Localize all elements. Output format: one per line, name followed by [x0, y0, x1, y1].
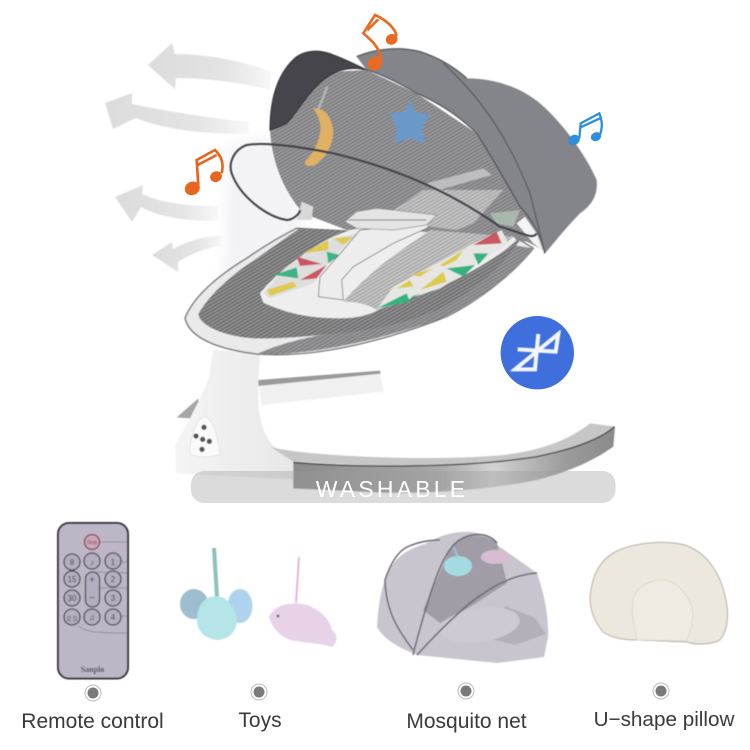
central harness strap: [318, 223, 432, 300]
washable label: WASHABLE: [316, 476, 468, 502]
pillow body: [590, 542, 728, 644]
bullet: toys: [251, 684, 267, 700]
elephant left ear: [180, 589, 208, 619]
remote body: [58, 523, 128, 678]
bullet: pillow: [653, 683, 669, 699]
dark visor: [270, 51, 367, 130]
toy: star: [390, 100, 430, 143]
canopy front edge: [357, 49, 545, 253]
accessory: u-shape pillow: [590, 542, 728, 644]
hinge right: [517, 217, 543, 252]
blue music note: [566, 113, 603, 147]
arrow 1: [148, 43, 272, 90]
left pinwheel backing: [263, 233, 357, 298]
canopy outer fabric: [357, 49, 597, 253]
elephant right ear: [228, 589, 252, 623]
side arm: [258, 372, 383, 405]
pad triangles left: [267, 237, 353, 296]
orange music note top: [363, 15, 399, 73]
remote button labels: 2: [111, 575, 116, 584]
fish string: [296, 557, 299, 603]
label: remote control: Remote control: [21, 710, 164, 733]
white mist behind seat: [222, 135, 305, 290]
toy strap: [318, 87, 327, 109]
net toy blue: [444, 556, 472, 576]
seat: [185, 190, 543, 355]
remote button labels: 4: [111, 613, 116, 622]
arrow 3: [115, 185, 218, 222]
remote button labels: 8: [70, 558, 75, 567]
label: mosquito net: Mosquito net: [406, 710, 527, 733]
net hoops: [385, 534, 537, 655]
control panel: [190, 417, 220, 457]
elephant head: [197, 596, 237, 640]
elephant strap: [214, 548, 217, 597]
remote button labels: ♪: [90, 558, 94, 567]
seat pad: [260, 228, 517, 318]
back cushion: [393, 190, 503, 230]
label: toys: Toys: [238, 709, 282, 732]
canopy outer: [231, 49, 597, 253]
orange music note left: [183, 150, 224, 198]
remote traces: [78, 542, 127, 633]
remote button labels: 3: [111, 594, 116, 603]
toy: banana: [305, 108, 333, 166]
remote button labels: ((·)): [67, 616, 77, 622]
net interior back wall: [423, 536, 507, 623]
bullet: mosquito net: [458, 683, 474, 699]
right pinwheel backing: [377, 230, 508, 309]
remote button labels: 30: [68, 594, 77, 603]
inner mesh canopy: [270, 70, 543, 250]
washable banner: [191, 471, 616, 503]
remote buttons: [64, 534, 121, 625]
seat shell rim: [185, 228, 533, 355]
remote button labels: 15: [68, 575, 77, 584]
bullet: remote control: [85, 685, 101, 701]
accessory: remote control: [58, 523, 128, 678]
canopy seam: [443, 63, 545, 253]
accessory: mosquito net: [377, 532, 548, 663]
pad triangles right: [377, 232, 502, 308]
remote brand: Sanplo: [81, 665, 104, 674]
arrow 2: [105, 93, 250, 134]
fish eye: [276, 614, 280, 618]
canopy hoop wire: [231, 144, 537, 236]
arrow 4: [152, 235, 222, 272]
remote button labels: 1: [111, 558, 116, 567]
net toy pink: [481, 550, 509, 564]
bluetooth symbol: [515, 334, 558, 369]
pad hatched centre: [343, 230, 513, 310]
cushion crease: [348, 219, 427, 221]
seat back strip: [427, 168, 492, 191]
column: [175, 350, 303, 480]
curved rail face: [293, 427, 615, 493]
base frame: [175, 350, 615, 493]
net dome: [377, 532, 548, 663]
remote button labels: −: [89, 593, 95, 604]
rim hatch: [257, 245, 533, 354]
seat mesh: [198, 228, 520, 338]
label: u-shape pillow: U−shape pillow: [594, 708, 734, 731]
remote button labels: +: [89, 575, 95, 586]
net right interior band: [495, 606, 546, 645]
remote button labels: [67, 540, 116, 622]
head support cushion: [345, 208, 437, 230]
pillow inner arch: [632, 580, 693, 641]
accessory: toys: [180, 548, 336, 647]
seat inside net: [438, 603, 522, 647]
rear foot: [177, 398, 198, 418]
net strap: [452, 545, 460, 560]
canopy and interior: [270, 70, 543, 250]
hinge left: [297, 202, 313, 220]
rail highlight: [293, 427, 614, 466]
side arm top band: [258, 371, 381, 386]
fish body: [269, 604, 336, 647]
bluetooth badge: [501, 316, 574, 389]
side pad: [490, 210, 520, 227]
remote button labels: ♫: [89, 613, 95, 622]
remote button labels: Stop: [87, 540, 97, 546]
motion arrows: [105, 43, 272, 272]
curved rail top: [270, 423, 615, 466]
